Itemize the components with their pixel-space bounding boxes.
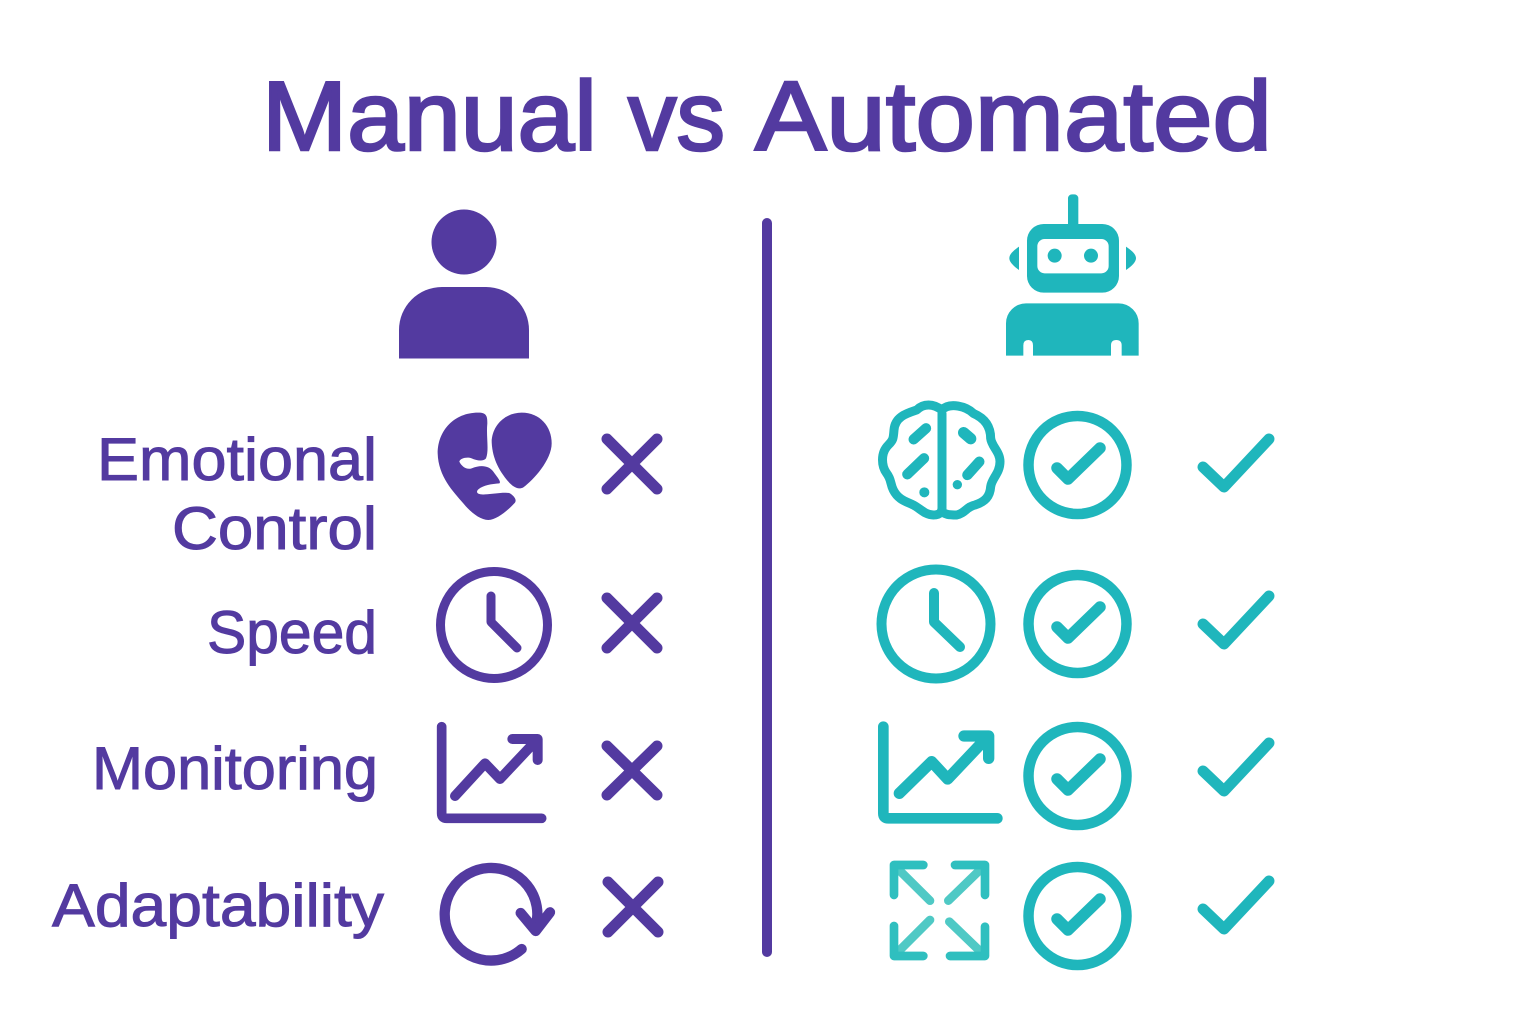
icon: chart (manual) [442, 727, 542, 818]
check circle: monitoring [1028, 727, 1126, 825]
icon: clock (manual) [440, 572, 548, 678]
label: Emotional Control: Control [172, 495, 377, 562]
icon: expand arrows (automated) [894, 865, 985, 956]
label: Emotional Control [97, 426, 377, 562]
title: vs [628, 61, 725, 171]
icon: broken heart [438, 413, 552, 520]
title: Automated [755, 61, 1272, 171]
title: Manual [262, 61, 597, 171]
label: Emotional Control: Emotional [97, 426, 377, 493]
icon: clock (automated) [882, 570, 990, 678]
check circle: emotional control [1028, 416, 1126, 514]
check: speed [1203, 596, 1269, 644]
icon: chart (automated) [883, 727, 997, 818]
label: Speed: Speed [207, 599, 377, 666]
label: Adaptability: Adaptability [52, 872, 384, 939]
center divider [762, 223, 772, 952]
icon: brain [882, 405, 1000, 515]
icon: person (manual) [399, 210, 529, 358]
cross: speed [607, 598, 657, 648]
cross: emotional control [607, 439, 657, 489]
label: Monitoring: Monitoring [92, 735, 378, 802]
icon: robot (automated) [1006, 194, 1139, 356]
cross: adaptability [608, 882, 658, 932]
check circle: adaptability [1028, 867, 1126, 965]
check: adaptability [1203, 881, 1269, 929]
cross: monitoring [607, 746, 657, 795]
check: emotional control [1203, 439, 1269, 487]
title [262, 61, 1272, 171]
check: monitoring [1203, 743, 1269, 791]
icon: refresh (manual) [445, 868, 550, 961]
check circle: speed [1028, 575, 1126, 673]
